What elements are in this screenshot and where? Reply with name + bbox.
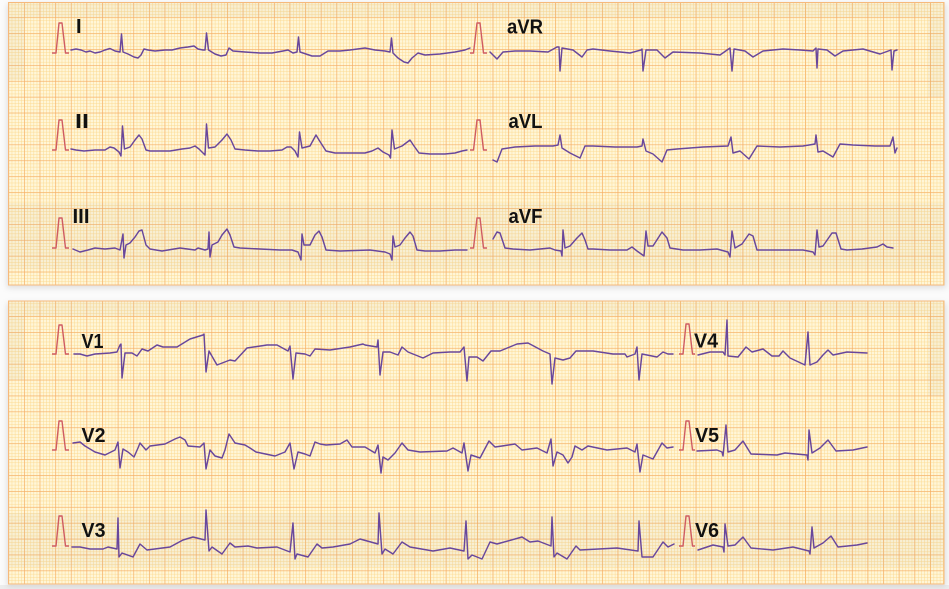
trace V1 (74, 334, 673, 384)
lead aVL (470, 111, 897, 162)
trace I (71, 33, 470, 63)
label II: II (75, 111, 89, 133)
lead V2 (52, 421, 673, 473)
calibration pulse III (52, 218, 69, 248)
lead V4 (679, 320, 867, 365)
trace V2 (73, 434, 673, 473)
label V1: V1 (82, 331, 104, 353)
trace V6 (698, 524, 867, 554)
lead II (52, 111, 467, 158)
lead III (52, 206, 467, 260)
label aVR: aVR (507, 16, 544, 38)
label V5: V5 (695, 425, 719, 447)
trace aVL (493, 135, 897, 162)
trace V3 (72, 510, 674, 559)
calibration pulse II (52, 120, 69, 150)
calibration pulse aVL (470, 120, 487, 150)
calibration pulse aVR (470, 23, 487, 53)
lead aVR (470, 16, 897, 71)
lead V1 (52, 325, 673, 384)
lead aVF (470, 206, 893, 257)
calibration pulse V2 (52, 421, 69, 450)
label V3: V3 (82, 520, 106, 542)
calibration pulse V4 (679, 324, 695, 354)
trace V5 (697, 425, 867, 460)
label V6: V6 (695, 520, 719, 542)
lead V3 (52, 510, 674, 559)
calibration pulse I (52, 23, 69, 53)
trace V4 (698, 320, 867, 365)
panel: chest leads (8, 301, 944, 584)
trace II (71, 124, 467, 158)
label aVL: aVL (508, 111, 542, 133)
trace aVR (490, 47, 897, 71)
trace III (73, 229, 467, 260)
label aVF: aVF (508, 206, 542, 228)
label III: III (72, 206, 90, 228)
calibration pulse V6 (679, 516, 695, 546)
lead V6 (679, 516, 867, 554)
lead I (52, 16, 470, 63)
calibration pulse V3 (52, 516, 69, 546)
calibration pulse aVF (470, 218, 487, 248)
calibration pulse V5 (679, 421, 695, 450)
calibration pulse V1 (52, 325, 69, 354)
lead V5 (679, 421, 867, 460)
label V4: V4 (694, 330, 719, 352)
trace aVF (493, 230, 893, 257)
label I: I (76, 16, 82, 38)
panel: limb leads (8, 2, 944, 285)
label V2: V2 (82, 425, 106, 447)
